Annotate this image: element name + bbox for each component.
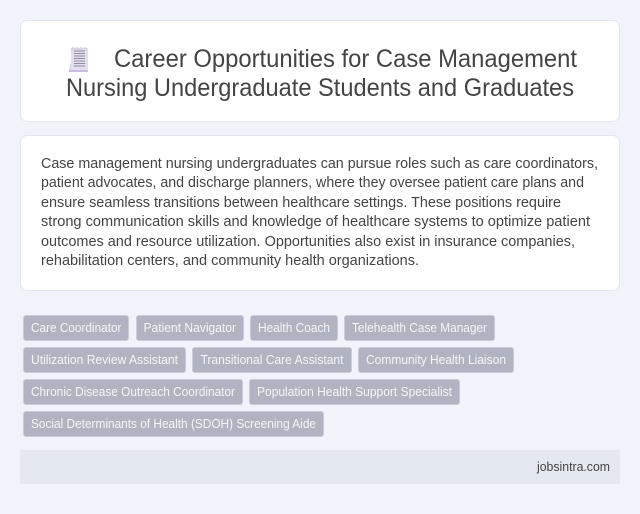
panel: header (20, 20, 620, 122)
text block: description: ensure seamless transitions between healthcare settings. These positions require (41, 195, 561, 211)
tag: Chronic Disease Outreach Coordinator: Chronic Disease Outreach Coordinator (31, 385, 235, 399)
footer bar (20, 450, 620, 484)
panel: description (20, 136, 620, 290)
tag: Utilization Review Assistant (24, 348, 186, 372)
text block: description: outcomes and resource utilization. Opportunities also exist in insurance companies, (41, 234, 575, 250)
text block: description (41, 156, 598, 269)
tag: Transitional Care Assistant: Transitional Care Assistant (200, 353, 344, 367)
tag: Social Determinants of Health (SDOH) Screening Aide (24, 412, 324, 436)
tag: Community Health Liaison (358, 348, 514, 372)
footer source: jobsintra.com (536, 460, 610, 474)
tag: Telehealth Case Manager: Telehealth Case Manager (352, 321, 487, 335)
tag: Population Health Support Specialist (250, 380, 460, 404)
tag: Social Determinants of Health (SDOH) Screening Aide: Social Determinants of Health (SDOH) Screening Aide (31, 417, 316, 431)
tag: Transitional Care Assistant (192, 348, 352, 372)
icon: paper scroll (69, 47, 88, 72)
text block: description: strong communication skills and knowledge of healthcare systems to optimize patient (41, 214, 590, 230)
career tags (24, 316, 514, 436)
tag: Utilization Review Assistant: Utilization Review Assistant (31, 353, 178, 367)
text block: description: rehabilitation centers, and community health organizations. (41, 253, 419, 269)
tag: Community Health Liaison: Community Health Liaison (366, 353, 506, 367)
tag: Care Coordinator (24, 316, 128, 340)
text block: description: patient advocates, and discharge planners, where they oversee patient care plans and (41, 175, 584, 191)
title: Nursing Undergraduate Students and Graduates (66, 74, 574, 102)
title (66, 45, 577, 102)
tag: Population Health Support Specialist: Population Health Support Specialist (257, 385, 453, 399)
tag: Patient Navigator: Patient Navigator (144, 321, 236, 335)
text block: description: Case management nursing undergraduates can pursue roles such as care coordinators, (41, 156, 598, 172)
tag: Telehealth Case Manager (344, 316, 494, 340)
tag: Health Coach: Health Coach (258, 321, 330, 335)
tag: Patient Navigator (136, 316, 244, 340)
tag: Health Coach (250, 316, 338, 340)
tag: Care Coordinator: Care Coordinator (31, 321, 122, 335)
tag: Chronic Disease Outreach Coordinator (24, 380, 242, 404)
title: Career Opportunities for Case Management (114, 45, 577, 73)
